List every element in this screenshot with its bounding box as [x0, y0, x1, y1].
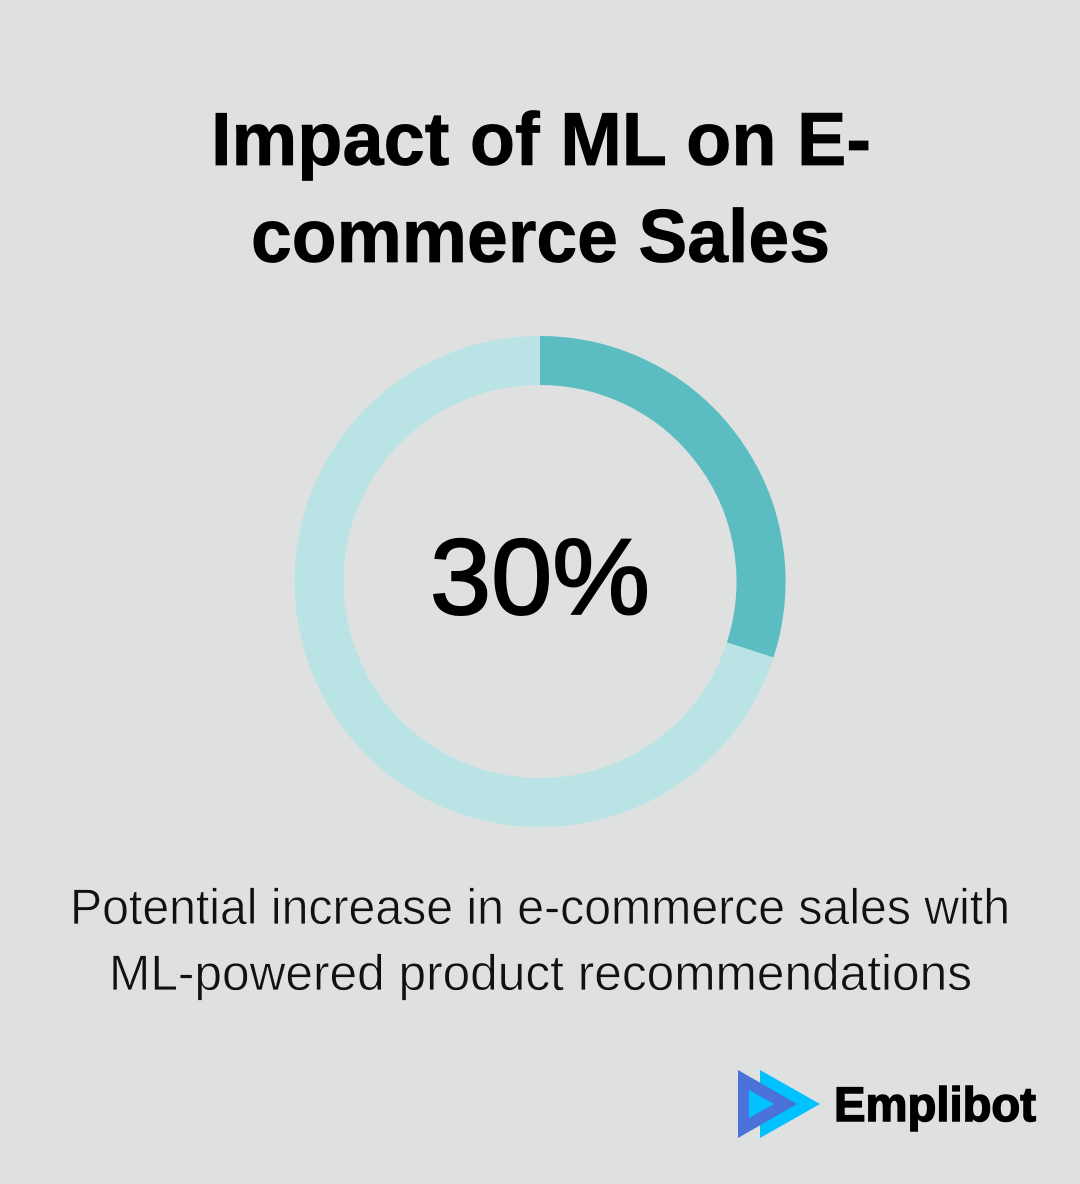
title: Impact of ML on E-: [211, 97, 871, 181]
description: Potential increase in e-commerce sales with: [70, 879, 1010, 935]
title: [211, 97, 871, 278]
wordmark: Emplibot: [834, 1079, 1036, 1132]
donut chart: 30%: [319, 360, 761, 802]
description: ML-powered product recommendations: [109, 945, 972, 1001]
title: commerce Sales: [251, 194, 830, 278]
icon: play triangles: [738, 1070, 820, 1138]
logo: Emplibot: [738, 1070, 1036, 1138]
value: 30%: 30%: [430, 516, 650, 637]
description: [70, 879, 1010, 1001]
